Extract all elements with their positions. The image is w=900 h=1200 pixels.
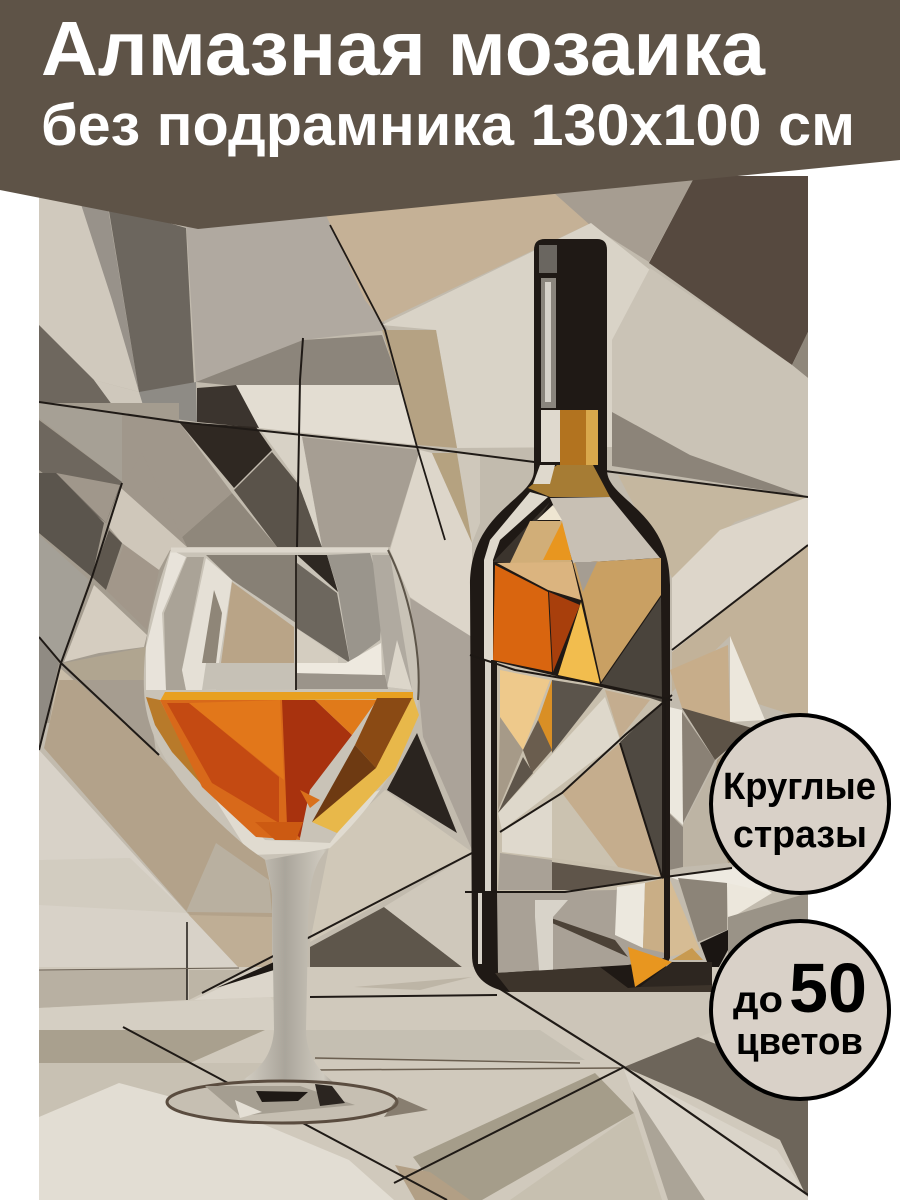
stem: [246, 849, 332, 1082]
bottle interior: shoulder: [484, 465, 660, 660]
background facets middle: [39, 403, 808, 1000]
badge: up to 50 colours: 50: [789, 949, 867, 1027]
lines across bottle: [465, 655, 732, 958]
bottle base: [478, 878, 712, 992]
subtitle: без подрамника 130х100 см: [41, 93, 855, 158]
painted black lines: [39, 225, 808, 1200]
background facets upper: [39, 176, 808, 497]
badge: up to 50 colours: цветов: [736, 1021, 863, 1063]
title: Алмазная мозаика: [41, 6, 766, 92]
header banner: [0, 0, 900, 229]
bottle interior: amber facets: [493, 558, 662, 702]
badge: round rhinestones: [711, 715, 889, 893]
wine bottle: [465, 239, 732, 992]
panel: cubist painting: [39, 176, 810, 1200]
wine in glass: [146, 692, 419, 840]
table facets: [39, 962, 810, 1200]
badge: up to 50 colours: [711, 921, 889, 1099]
badge: round rhinestones: стразы: [733, 814, 867, 856]
badge: up to 50 colours: до: [733, 979, 783, 1020]
glass bowl: [144, 549, 419, 860]
bottle interior: lower facets: [485, 660, 662, 892]
glass foot: [167, 1081, 428, 1123]
bottle neck highlights: [539, 245, 598, 465]
wine glass: [144, 549, 428, 1123]
badge: round rhinestones: Круглые: [723, 766, 876, 808]
bottle silhouette: [470, 239, 670, 992]
